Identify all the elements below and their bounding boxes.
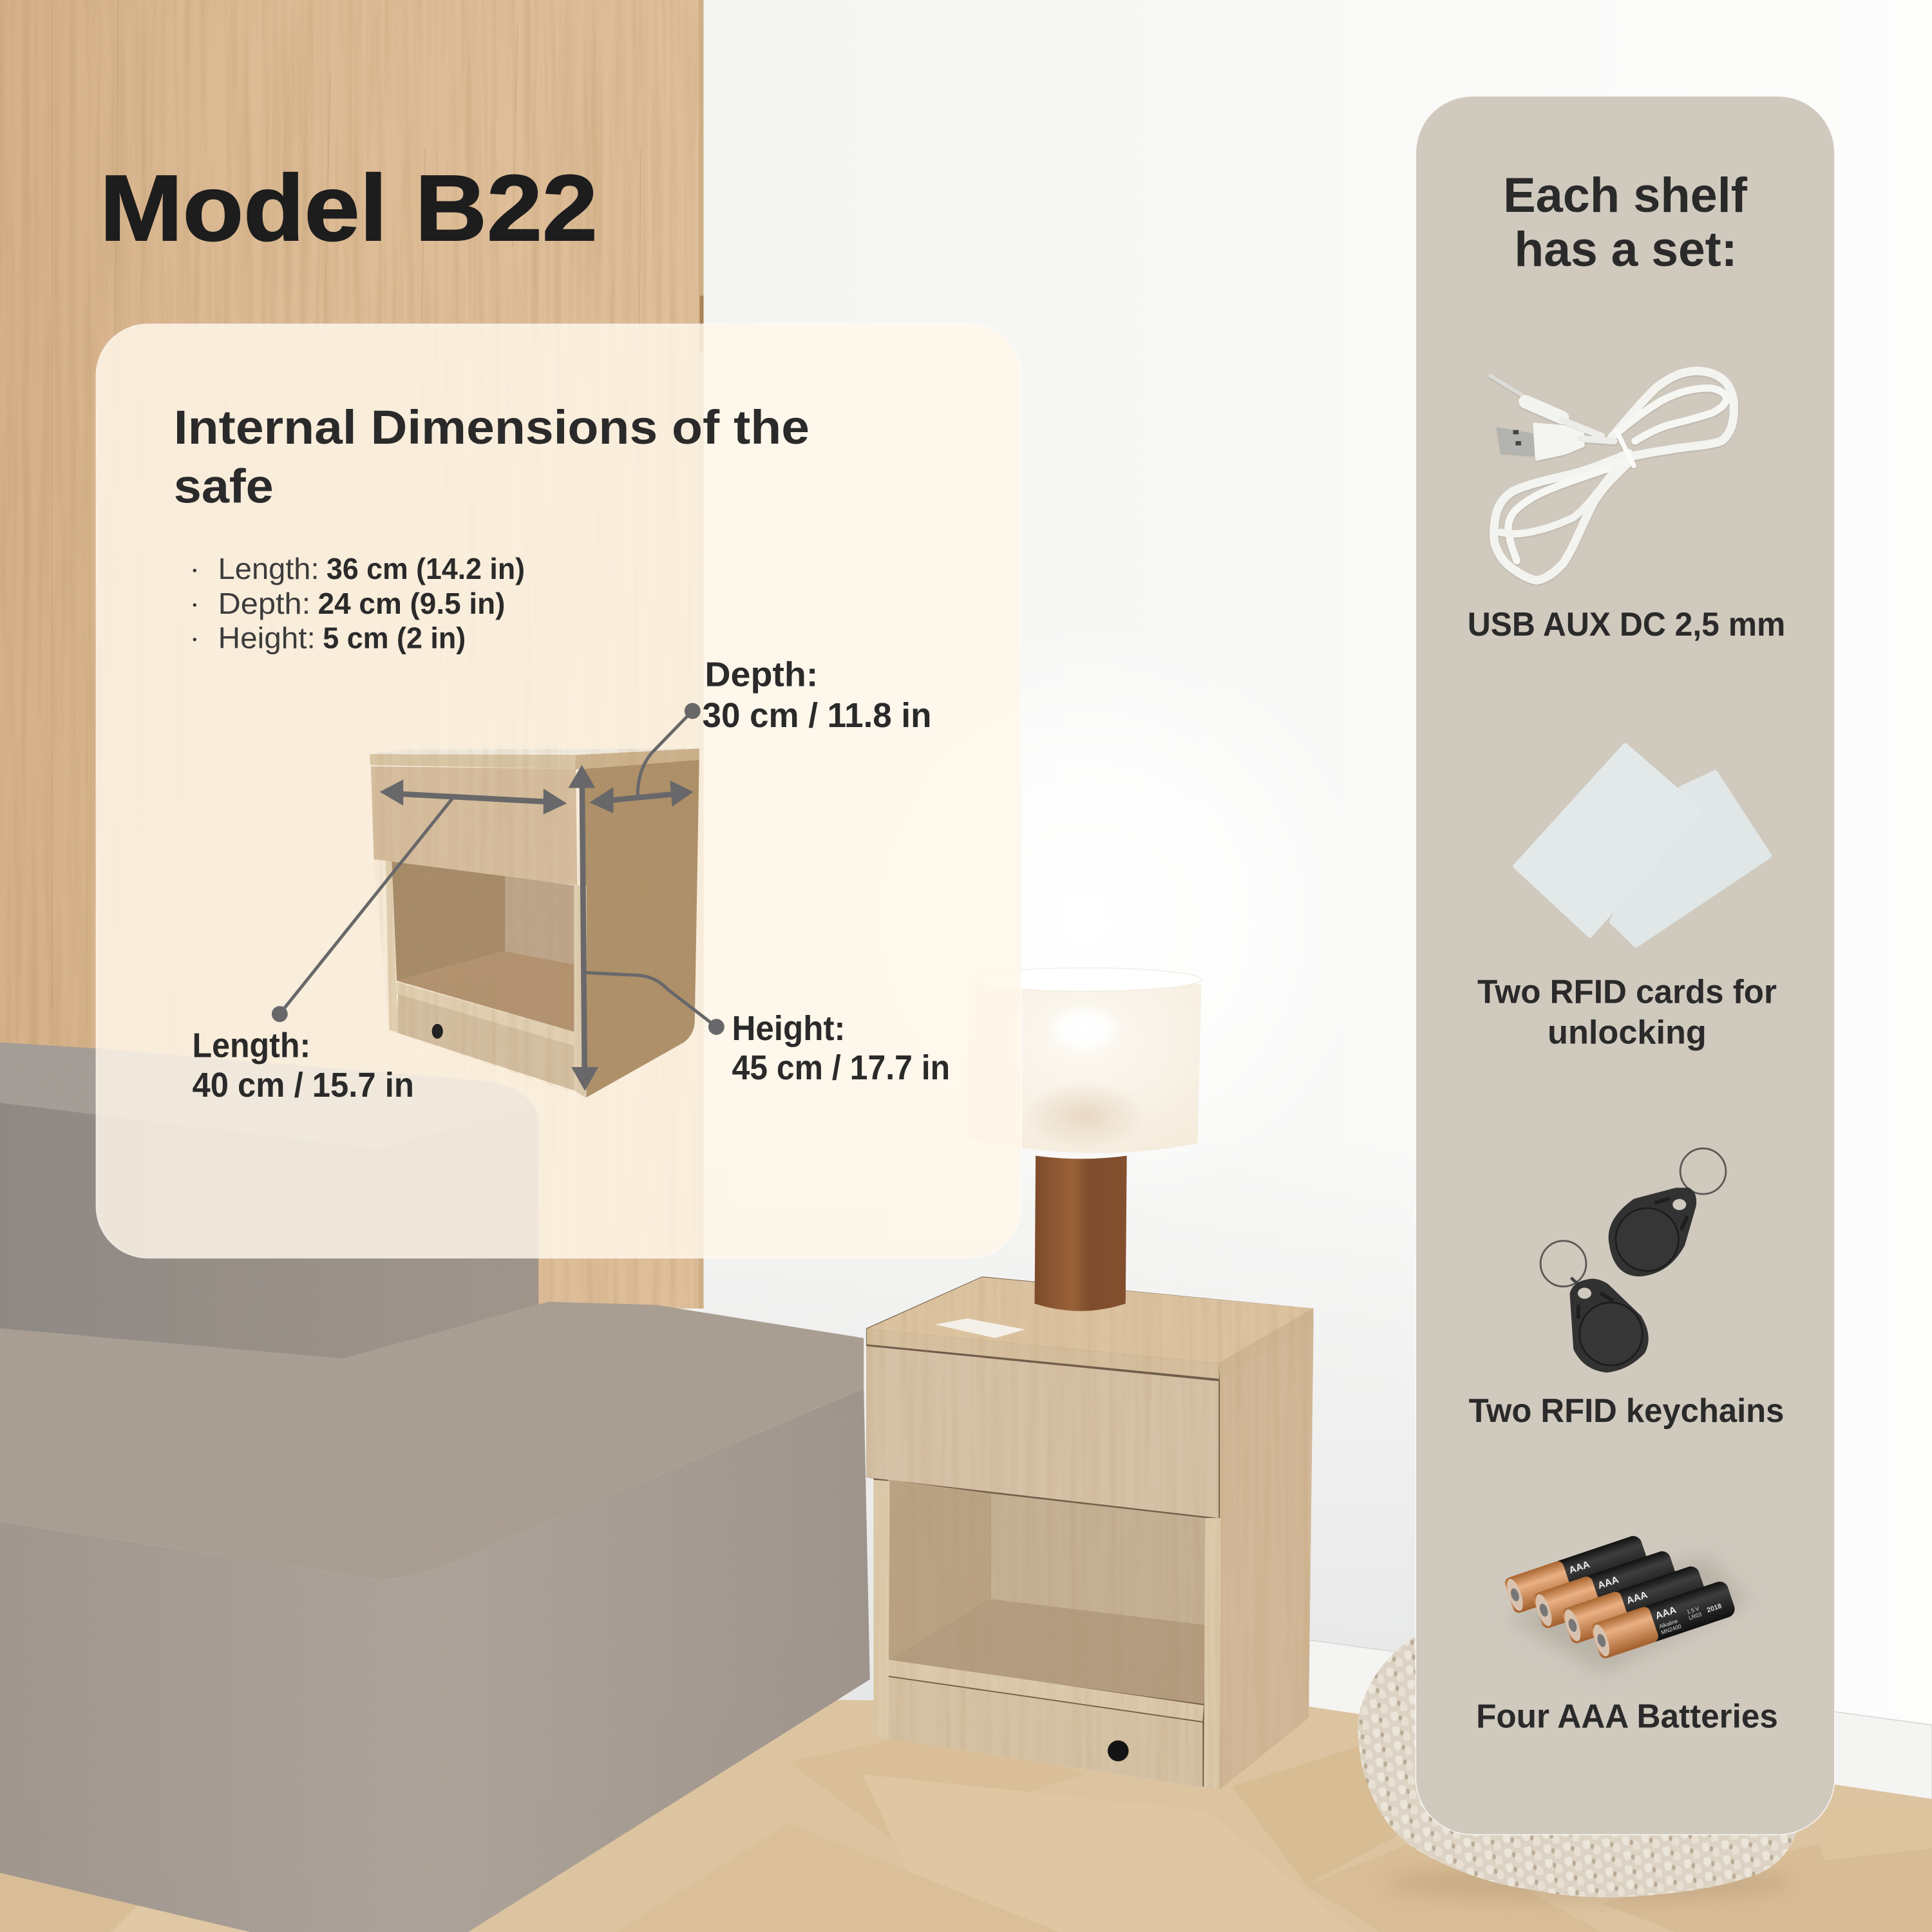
- battery 4: LR03: [1688, 1611, 1703, 1621]
- parquet floor: [0, 1688, 1932, 1932]
- dimensions list: 36 cm (14.2 in): [327, 552, 525, 585]
- length label: Length:: [192, 1027, 310, 1065]
- icon: RFID cards: [1515, 746, 1769, 945]
- nightstand drawer: [866, 1346, 1218, 1518]
- panel heading: safe: [174, 459, 274, 513]
- dimensions list: Length:: [218, 552, 319, 585]
- baseboard: [1309, 1640, 1932, 1801]
- nightstand shelf: [888, 1599, 1205, 1704]
- dimension arrows: [272, 703, 724, 1091]
- icon: AAA batteries: [1503, 1534, 1750, 1673]
- panel: each shelf has a set: [1416, 96, 1835, 1835]
- lamp hot spot: [1047, 1004, 1121, 1054]
- nightstand photo: [862, 1269, 1318, 1793]
- panel background: [96, 324, 1021, 1258]
- panel heading: Internal Dimensions of the: [174, 400, 810, 454]
- dimensions list: 5 cm (2 in): [323, 621, 466, 654]
- battery 1: [1503, 1534, 1651, 1615]
- nightstand left stile: [874, 1480, 889, 1739]
- length arrow: [380, 779, 567, 815]
- sofa seat front: [0, 1388, 870, 1932]
- battery 2: AAA: [1596, 1574, 1620, 1591]
- dimensions list: [193, 552, 525, 654]
- RFID cards label: Two RFID cards for: [1477, 972, 1777, 1010]
- nightstand interior back: [990, 1493, 1205, 1625]
- depth leader: [638, 703, 701, 799]
- sofa backrest top face: [0, 1043, 527, 1150]
- dimensions list: Height:: [218, 621, 316, 654]
- battery 3: [1561, 1564, 1708, 1645]
- nightstand top edge: [867, 1329, 1219, 1379]
- icon: RFID keychains: [1540, 1148, 1726, 1372]
- depth label: 30 cm / 11.8 in: [703, 697, 931, 735]
- top key fob: [1609, 1148, 1726, 1276]
- nightstand wood grain: [862, 1269, 1318, 1793]
- length leader: [272, 798, 453, 1022]
- USB label: USB AUX DC 2,5 mm: [1468, 605, 1785, 643]
- wall lower shading: [703, 1146, 1416, 1712]
- battery 4: Alkaline: [1658, 1618, 1679, 1630]
- sofa: [0, 1043, 873, 1932]
- pouf body: [1358, 1638, 1799, 1897]
- pouf shadow: [1386, 1866, 1793, 1900]
- sensor: [1108, 1740, 1129, 1761]
- title: Model B22: [100, 155, 598, 260]
- dimensions list: 24 cm (9.5 in): [318, 587, 505, 620]
- length label: 40 cm / 15.7 in: [192, 1066, 414, 1104]
- battery 4: 1.5 V: [1686, 1605, 1700, 1615]
- nightstand top: [867, 1277, 1314, 1363]
- height label: 45 cm / 17.7 in: [732, 1049, 950, 1087]
- lamp glow: [776, 616, 1392, 1232]
- sofa backrest: [0, 1043, 538, 1368]
- nightstand interior left wall: [888, 1480, 990, 1661]
- wood wall panel: [0, 0, 703, 1309]
- lamp shade top: [970, 968, 1201, 991]
- pouf: [1358, 1638, 1799, 1900]
- battery 4: 2018: [1706, 1602, 1723, 1615]
- height leader: [586, 972, 724, 1035]
- nightstand side: [1220, 1326, 1314, 1789]
- nightstand lower front: [888, 1677, 1202, 1788]
- battery 4: [1590, 1579, 1737, 1660]
- nightstand right stile: [1204, 1518, 1221, 1789]
- battery 1: AAA: [1567, 1559, 1591, 1576]
- height label: Height:: [732, 1010, 845, 1048]
- dimensions list: Depth:: [218, 587, 310, 620]
- lamp: [966, 968, 1201, 1311]
- right panel heading: has a set:: [1514, 222, 1738, 277]
- right panel background: [1416, 96, 1835, 1835]
- white card on top: [935, 1318, 1025, 1338]
- sofa seat top: [0, 1302, 864, 1579]
- small nightstand diagram: [365, 746, 703, 1103]
- depth arrow: [589, 781, 694, 813]
- sofa fabric texture: [0, 1043, 873, 1932]
- battery 2: [1532, 1549, 1680, 1630]
- lamp base: [1035, 1156, 1127, 1311]
- height arrow: [568, 765, 598, 1091]
- lamp mesh shadow: [1023, 1081, 1146, 1150]
- batteries label: Four AAA Batteries: [1476, 1697, 1778, 1734]
- lamp shade: [966, 977, 1201, 1153]
- nightstand silhouette: [866, 1276, 1314, 1789]
- wood grain: [0, 0, 703, 1309]
- battery 4: MN2400: [1660, 1623, 1682, 1636]
- keychains label: Two RFID keychains: [1469, 1392, 1784, 1429]
- battery 3: AAA: [1625, 1589, 1649, 1607]
- nightstand top right edge: [1218, 1309, 1314, 1379]
- icon: USB cable: [1490, 371, 1734, 580]
- right panel heading: Each shelf: [1503, 168, 1748, 223]
- bottom key fob: [1540, 1241, 1649, 1372]
- RFID cards label: unlocking: [1548, 1014, 1707, 1051]
- nightstand shelf lip: [888, 1660, 1204, 1721]
- battery 4: AAA: [1654, 1605, 1678, 1622]
- depth label: Depth:: [705, 656, 818, 694]
- battery shadow: [1506, 1555, 1750, 1673]
- panel: internal dimensions: [96, 324, 1021, 1258]
